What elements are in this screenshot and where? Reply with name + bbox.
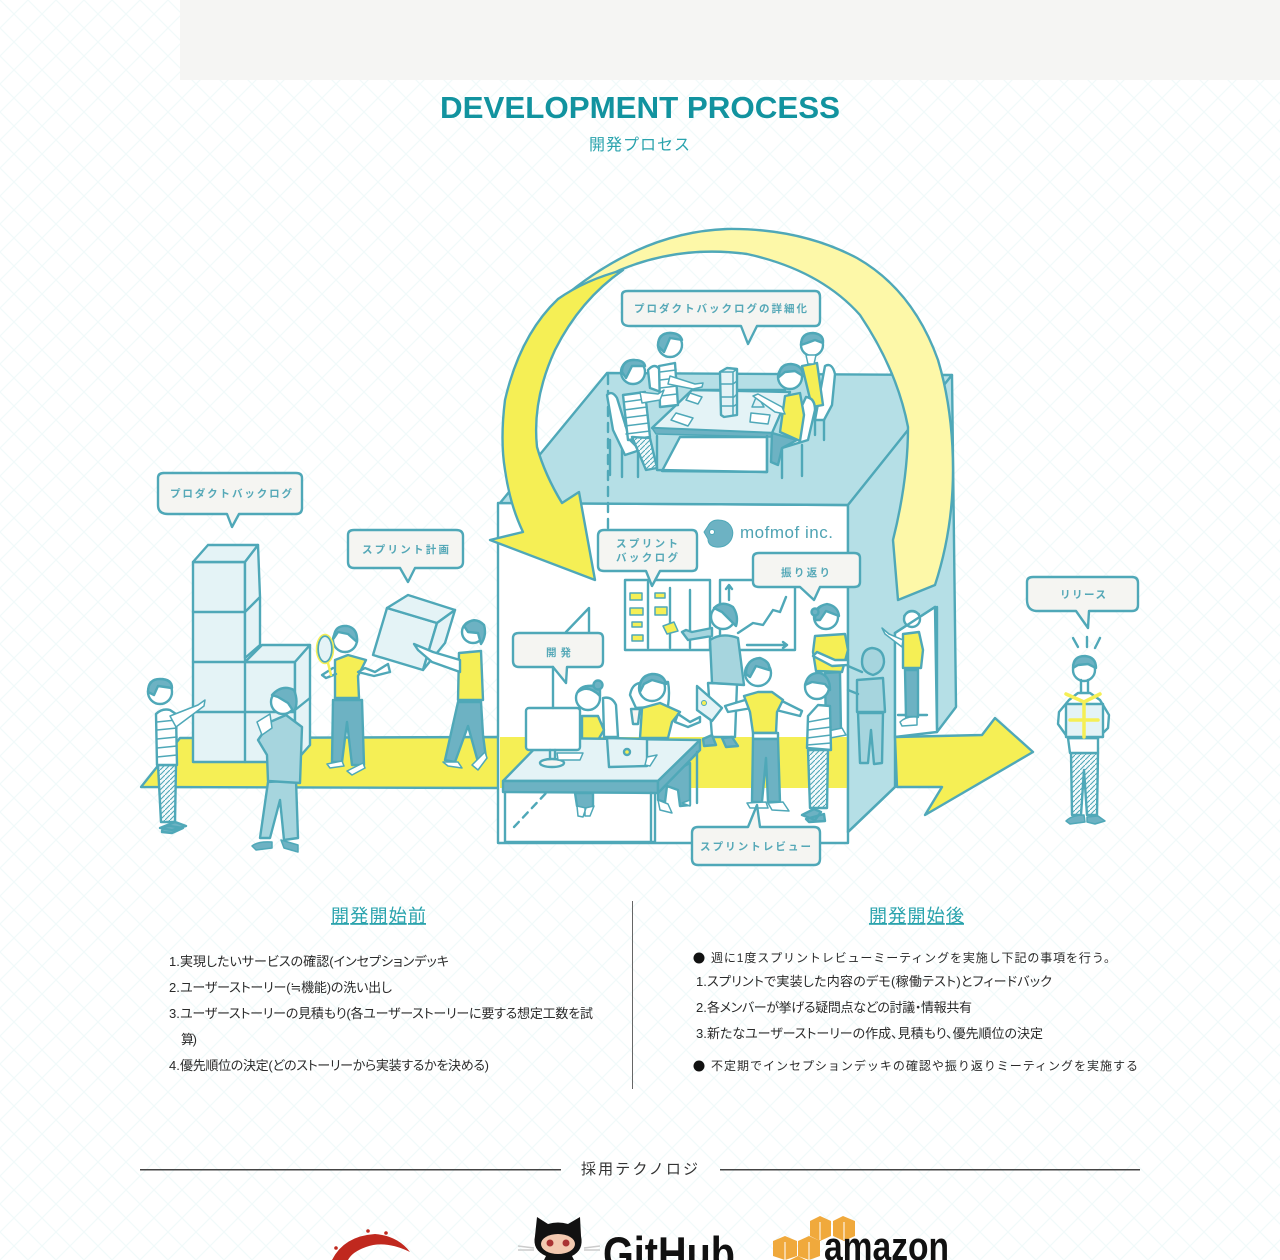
laptop — [607, 738, 657, 767]
list: after: 不定期でインセプションデッキの確認や振り返りミーティングを実施する — [711, 1058, 1138, 1073]
top grey banner — [180, 0, 1280, 80]
list: before — [169, 954, 593, 1073]
person: back view on wall — [848, 648, 885, 764]
roof — [500, 373, 952, 505]
monitor — [526, 708, 583, 767]
dev bubble pole — [553, 608, 589, 708]
list: after — [694, 951, 1138, 1073]
person: meeting, striped front — [607, 360, 664, 477]
meeting table — [652, 368, 790, 472]
person: striped man pointing — [148, 679, 205, 833]
section: before development — [169, 906, 593, 1073]
list: before: 実現したいサービスの確認(インセプションデッキ — [180, 954, 449, 969]
right side wall — [848, 375, 956, 832]
opening under meeting table — [662, 437, 767, 472]
section: after development — [694, 906, 1138, 1073]
bubble: development: 開発 — [546, 646, 572, 659]
heading: before: 開発開始前 — [331, 906, 426, 926]
yellow path through building — [500, 737, 848, 788]
person: man at board — [663, 604, 744, 747]
building front wall — [498, 503, 848, 843]
big yellow cycle arrow: pale arc — [560, 229, 953, 600]
big yellow cycle arrow: bright head — [490, 270, 623, 580]
person: centre presenter — [725, 658, 802, 811]
cube carried — [373, 595, 455, 670]
bubble: development — [513, 633, 603, 683]
person: yellow woman by wall — [812, 604, 848, 738]
bubble: sprint backlog: スプリント — [616, 538, 678, 550]
list: before: 4. — [169, 1058, 180, 1073]
list: after: 3. — [696, 1026, 707, 1041]
list: before: 1. — [169, 954, 180, 969]
subtitle: 開発プロセス — [589, 136, 690, 154]
bubble: retrospective — [753, 553, 860, 600]
list: before: 算) — [181, 1032, 197, 1047]
person: woman in suit — [252, 688, 302, 852]
list: after: 週に1度スプリントレビューミーティングを実施し下記の事項を行う。 — [711, 951, 1116, 965]
logo: mofmof inc — [704, 520, 833, 547]
person: developer with coffee — [630, 674, 700, 813]
bubble: product backlog — [158, 473, 302, 527]
person: in doorway — [882, 611, 932, 726]
roof dashed guide — [607, 375, 609, 530]
list: after: 2. — [696, 1000, 707, 1015]
list: before: ユーザーストーリー(≒機能)の洗い出し — [180, 980, 392, 995]
list: after: スプリントで実装した内容のデモ(稼働テスト)とフィードバック — [707, 974, 1052, 989]
cube stack — [193, 545, 310, 762]
bubble: product backlog: プロダクトバックログ — [170, 487, 292, 500]
person: developer at monitor — [575, 680, 618, 817]
person: meeting, yellow front — [753, 364, 815, 478]
person: meeting, yellow back — [801, 333, 835, 440]
right wall edge over doorway — [895, 607, 935, 633]
logo: rails — [332, 1229, 478, 1260]
bubble: sprint review: スプリントレビュー — [700, 840, 811, 853]
logo: amazon — [773, 1216, 949, 1260]
person: release man with gift — [1058, 637, 1109, 824]
heading: technology rule: 採用テクノロジ — [581, 1161, 698, 1178]
list: before: 3. — [169, 1006, 180, 1021]
list: after: 新たなユーザーストーリーの作成、見積もり、優先順位の決定 — [707, 1026, 1043, 1041]
yellow arrow to release — [895, 718, 1033, 815]
list: before: 優先順位の決定(どのストーリーから実装するかを決める) — [180, 1058, 489, 1073]
bubble: retrospective: 振り返り — [781, 566, 830, 579]
person: yellow shirt with magnifier — [316, 626, 390, 775]
person: meeting, striped back — [648, 333, 703, 407]
tablet — [697, 686, 722, 721]
list: before: ユーザーストーリーの見積もり(各ユーザーストーリーに要する想定工数を試 — [180, 1006, 593, 1021]
bubble: sprint backlog: バックログ — [616, 551, 678, 564]
bubble: release — [1027, 577, 1138, 628]
door opening — [895, 607, 937, 737]
bubble: sprint planning — [348, 530, 463, 582]
person: yellow shirt carrying — [414, 620, 487, 770]
bubble: sprint backlog — [598, 530, 697, 586]
bubble: release: リリース — [1060, 589, 1106, 601]
block tower — [720, 368, 737, 417]
list: after: 1. — [696, 974, 707, 989]
vertical divider — [632, 901, 633, 1089]
heading: after: 開発開始後 — [869, 906, 964, 926]
logo: mofmof inc: mofmof inc. — [740, 523, 833, 542]
bubble: product backlog refinement — [622, 291, 820, 344]
person: striped woman front — [802, 673, 831, 822]
yellow path left — [141, 737, 500, 788]
card piles — [671, 393, 770, 426]
bubble: sprint review — [692, 805, 820, 865]
bubble: sprint planning: スプリント計画 — [362, 543, 449, 556]
kanban board — [625, 580, 710, 650]
list: before: 2. — [169, 980, 180, 995]
title: DEVELOPMENT PROCESS — [440, 90, 840, 125]
bubble: product backlog refinement: プロダクトバックログの詳細化 — [634, 302, 808, 315]
desk — [503, 708, 700, 842]
burndown chart board — [720, 580, 795, 650]
list: after: 各メンバーが挙げる疑問点などの討議・情報共有 — [707, 1000, 972, 1015]
wall lower edge — [848, 787, 895, 832]
logo: github — [518, 1217, 735, 1260]
illustration: development process — [141, 229, 1138, 865]
